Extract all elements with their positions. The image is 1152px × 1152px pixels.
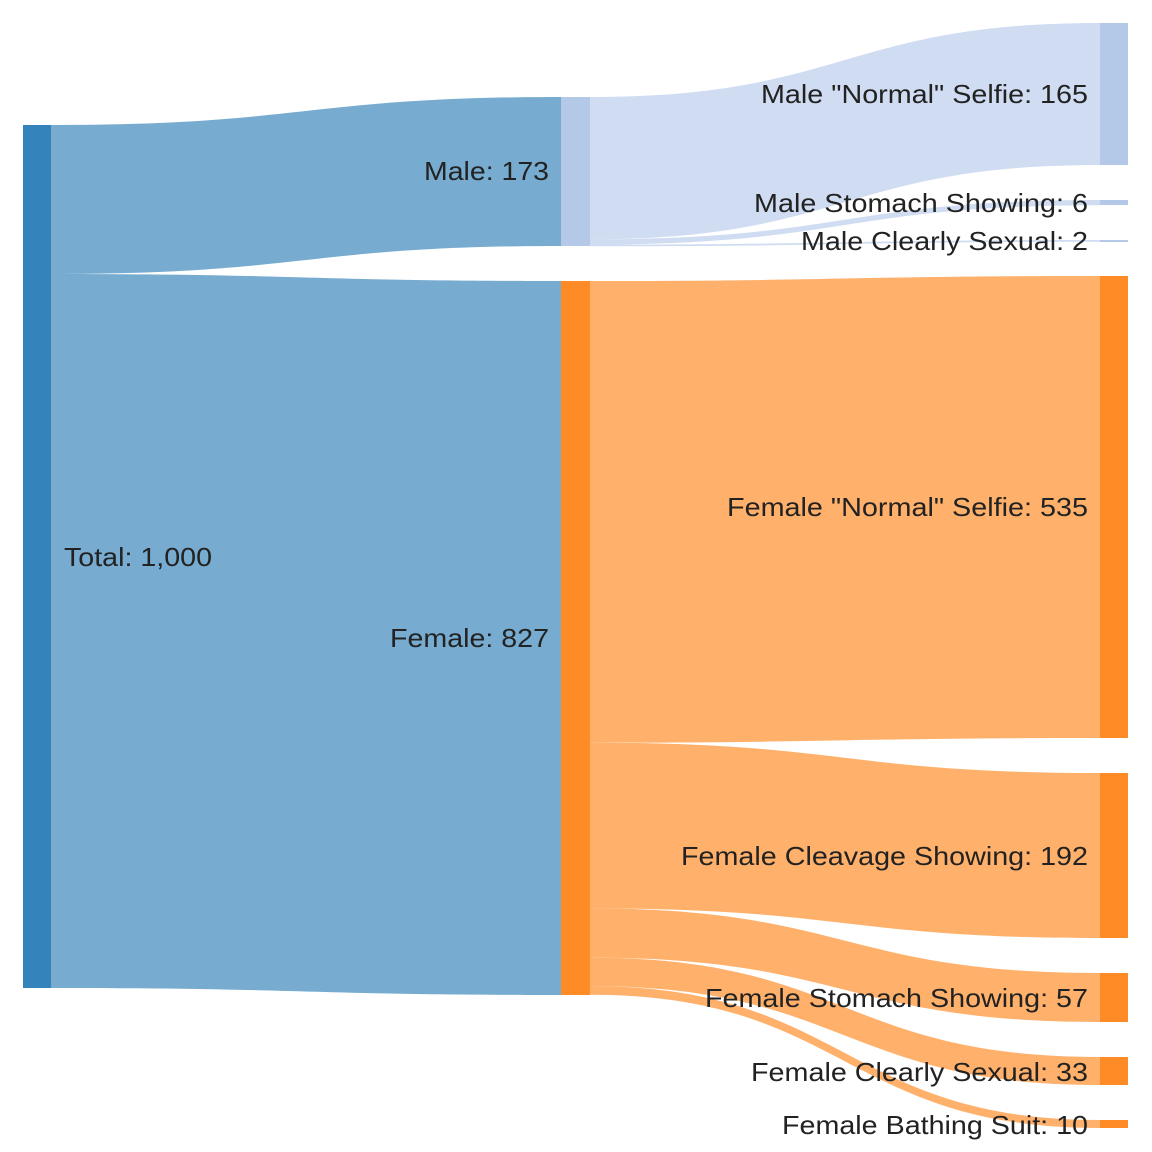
node: total — [23, 125, 51, 988]
labels: Male: 173 — [424, 156, 549, 186]
node: male clearly sexual — [1100, 240, 1128, 242]
labels: Total: 1,000 — [64, 542, 212, 572]
link: female to female normal — [590, 276, 1100, 743]
link: male to male stomach — [590, 200, 1100, 245]
labels: Male Clearly Sexual: 2 — [801, 226, 1088, 256]
labels: Female Bathing Suit: 10 — [782, 1110, 1088, 1140]
link: total to male — [51, 97, 561, 274]
node: male normal — [1100, 23, 1128, 165]
node: female clearly sexual — [1100, 1057, 1128, 1085]
node: female — [561, 281, 590, 995]
labels: Female "Normal" Selfie: 535 — [727, 492, 1088, 522]
link: male to male normal — [590, 23, 1100, 239]
node: female normal — [1100, 276, 1128, 738]
node: female cleavage — [1100, 773, 1128, 938]
link: female to bathing suit — [590, 986, 1100, 1128]
labels: Female Cleavage Showing: 192 — [681, 841, 1088, 871]
labels: Female Clearly Sexual: 33 — [751, 1057, 1088, 1087]
labels: Male Stomach Showing: 6 — [754, 188, 1088, 218]
labels: Male "Normal" Selfie: 165 — [761, 79, 1088, 109]
link: female to clearly sexual — [590, 958, 1100, 1085]
link: total to female — [51, 274, 561, 995]
labels: Female: 827 — [390, 623, 549, 653]
labels: Female Stomach Showing: 57 — [705, 983, 1088, 1013]
link: female to cleavage — [590, 743, 1100, 938]
node: male stomach — [1100, 200, 1128, 205]
link: male to male clearly sexual — [590, 240, 1100, 246]
node: female stomach — [1100, 973, 1128, 1022]
link: female to stomach — [590, 908, 1100, 1022]
node: female bathing suit — [1100, 1120, 1128, 1128]
node: male — [561, 97, 590, 246]
